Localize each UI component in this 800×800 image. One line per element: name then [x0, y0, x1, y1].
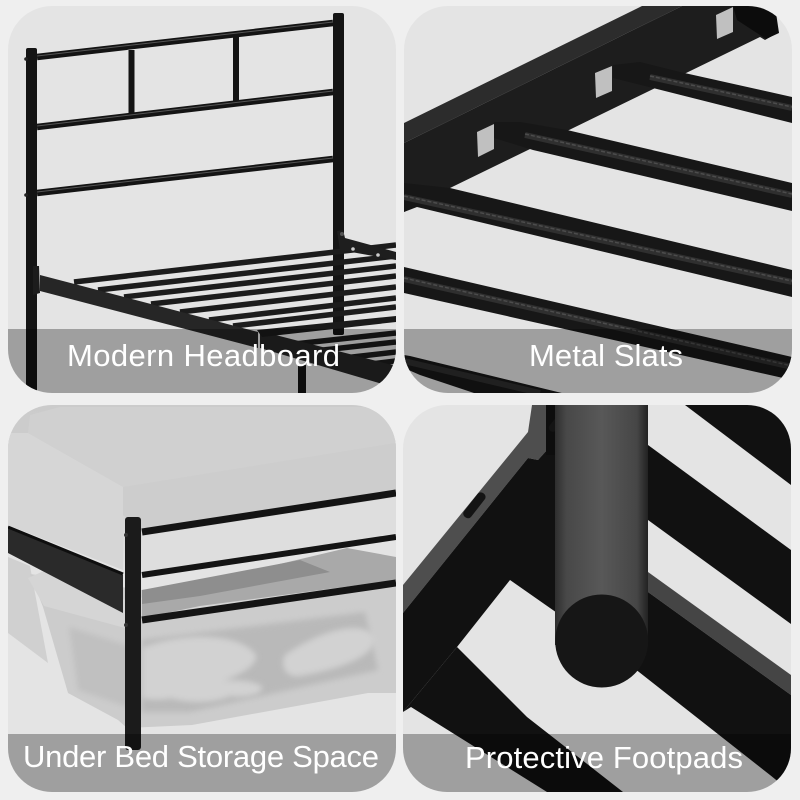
caption: Protective Footpads: Protective Footpads — [465, 740, 743, 775]
icon: support post — [555, 405, 648, 645]
icon: left frame rail — [403, 405, 571, 712]
icon: mattress — [8, 405, 396, 573]
icon: side rail — [8, 527, 123, 613]
caption band — [8, 734, 396, 792]
panel: metal slats — [404, 6, 792, 395]
panel: under bed storage space — [8, 405, 396, 792]
icon: rear bed rail — [337, 230, 396, 260]
icon: side rail and front leg — [33, 266, 396, 393]
icon: slat cutouts — [477, 7, 733, 157]
panel: modern headboard — [8, 6, 396, 393]
caption: Metal Slats: Metal Slats — [529, 338, 683, 373]
icon: tube slats — [404, 62, 792, 395]
caption: Modern Headboard: Modern Headboard — [67, 338, 340, 373]
caption band — [403, 734, 791, 792]
caption band — [8, 329, 396, 393]
caption: Under Bed Storage Space: Under Bed Storage Space — [23, 739, 379, 774]
icon: foot rails and post — [124, 493, 396, 750]
icon: folded towels — [142, 628, 375, 702]
icon: bed slats — [74, 245, 396, 366]
icon: right bars — [630, 405, 791, 792]
caption band — [404, 329, 792, 393]
icon: headboard frame — [24, 13, 344, 393]
icon: lower left bar — [403, 647, 623, 792]
icon: round footpad — [555, 594, 648, 688]
panel: protective footpads — [403, 405, 791, 792]
icon: storage box — [8, 548, 396, 728]
icon: steel beam — [404, 6, 779, 212]
